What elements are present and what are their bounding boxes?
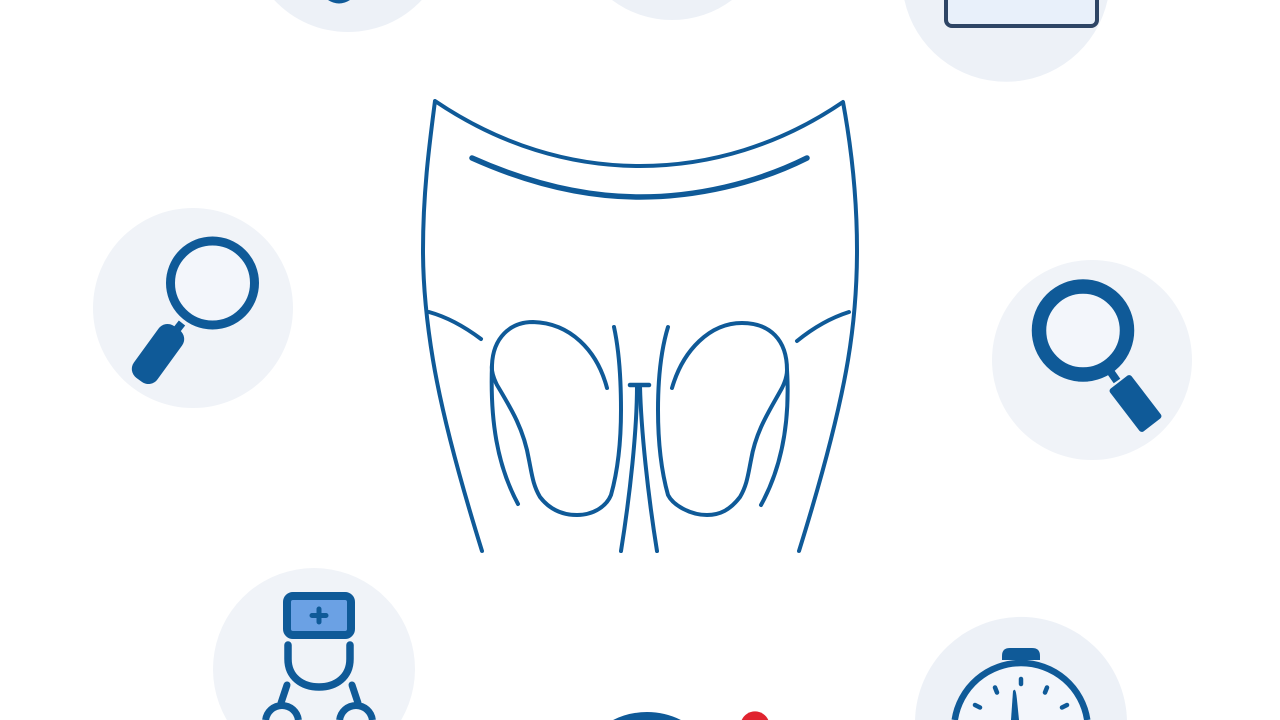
right hip line [797,312,849,341]
stethoscope [266,685,372,720]
icon: left magnifying glass [93,208,293,408]
waistband [472,158,807,197]
left inner shape [492,322,621,515]
left hip line [429,312,481,339]
pelvis outline [423,101,857,551]
icon: bottom centre dark dome [613,712,681,720]
icon: top centre badge [612,0,732,20]
icon: bottom centre red marker [742,711,768,720]
central T bar [630,383,649,387]
doctor face [288,645,350,687]
icon: top right clipboard badge [904,0,1108,82]
icon: doctor with stethoscope [213,568,415,720]
icon: stopwatch [915,617,1127,720]
left outer line [492,365,518,504]
doctor cap [287,596,351,635]
right inner shape [658,323,787,515]
right outer line [761,370,788,505]
central anatomy outline [423,101,857,551]
icon: right magnifying glass [992,260,1192,460]
central left leg [621,386,637,551]
icon: top left badge [274,0,422,32]
central right leg [640,386,657,551]
